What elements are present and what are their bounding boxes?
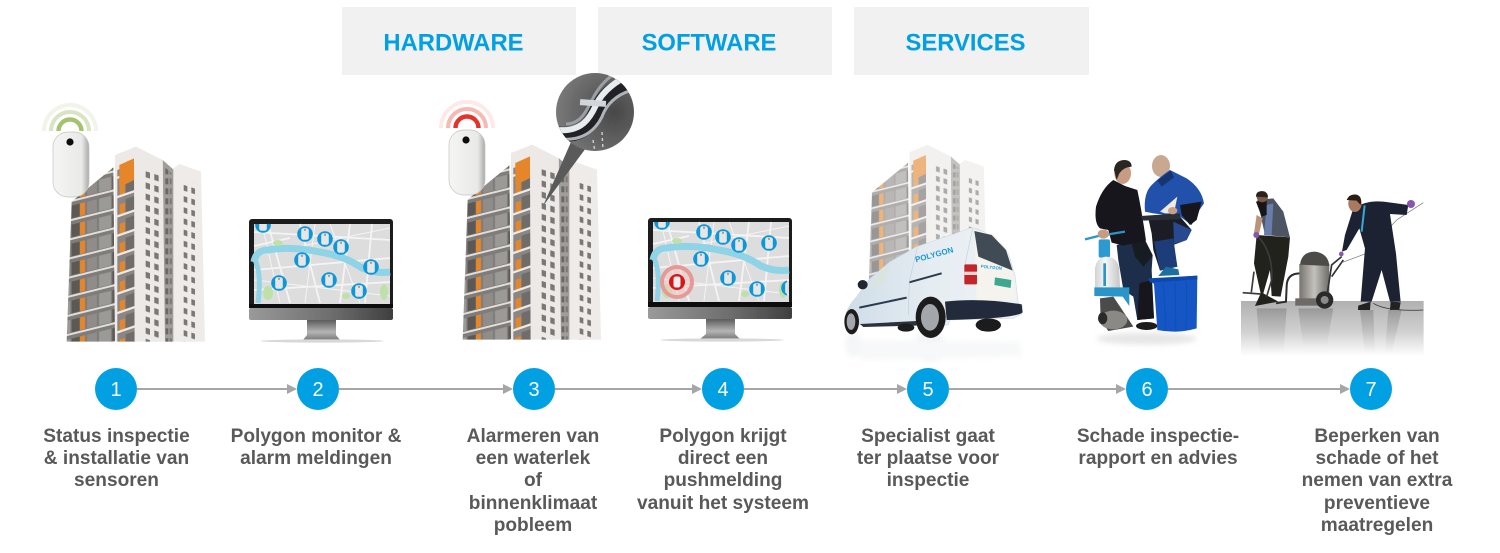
illustration: monitor with sensor map xyxy=(249,217,393,343)
step 2 badge xyxy=(297,368,339,410)
step 1 badge: 1 xyxy=(110,379,122,401)
step 3 text: binnenklimaat xyxy=(469,493,598,514)
step 3 text: pobleem xyxy=(494,515,572,536)
step 5 text: Specialist gaat xyxy=(861,426,995,447)
step 2 badge: 2 xyxy=(312,379,324,401)
step 7 badge: 7 xyxy=(1365,379,1377,401)
step 7 text: preventieve xyxy=(1324,493,1430,514)
step 6 text: rapport en advies xyxy=(1078,448,1238,469)
step 4 badge: 4 xyxy=(717,379,729,401)
step 1 text: & installatie van xyxy=(44,448,189,469)
step 6 badge: 6 xyxy=(1141,379,1153,401)
illustration: cleaning crew with vacuum on wet floor xyxy=(1241,191,1424,356)
step 7 badge xyxy=(1350,368,1392,410)
timeline arrow 6 to 7 xyxy=(1168,384,1350,394)
step 4 text: Polygon krijgt xyxy=(659,426,787,447)
illustration: building with red sensor and leak callout xyxy=(441,72,634,340)
timeline arrow 3 to 4 xyxy=(555,384,702,394)
step 3 text: Alarmeren van xyxy=(467,426,599,447)
step 5 text: inspectie xyxy=(887,470,969,491)
timeline arrow 5 to 6 xyxy=(949,384,1126,394)
timeline arrow 4 to 5 xyxy=(744,384,907,394)
illustration: building with green sensor xyxy=(44,105,205,342)
timeline arrow 1 to 2 xyxy=(137,384,297,394)
step 7 text: Beperken van xyxy=(1314,426,1440,447)
step 1 badge xyxy=(95,368,137,410)
illustration: service van and building: POLYGON xyxy=(914,245,955,264)
step 4 text: direct een xyxy=(678,448,768,469)
step 2 text: alarm meldingen xyxy=(240,448,392,469)
step 3 text: een waterlek xyxy=(476,448,591,469)
header: HARDWARE xyxy=(342,7,576,75)
step 4 badge xyxy=(702,368,744,410)
step 6 text: Schade inspectie- xyxy=(1077,426,1239,447)
illustration: two inspectors with sprayer and bucket xyxy=(1085,155,1204,345)
header: SOFTWARE xyxy=(598,7,832,75)
step 5 text: ter plaatse voor xyxy=(857,448,1000,469)
illustration: service van and building: POLYGON xyxy=(981,264,1002,271)
step 5 badge: 5 xyxy=(922,379,934,401)
illustration: service van and building xyxy=(844,145,1023,362)
timeline arrow 2 to 3 xyxy=(339,384,513,394)
step 3 badge: 3 xyxy=(528,379,540,401)
step 1 text: Status inspectie xyxy=(43,426,190,447)
header: SOFTWARE: SOFTWARE xyxy=(642,30,776,56)
step 2 text: Polygon monitor & xyxy=(231,426,402,447)
step 5 badge xyxy=(907,368,949,410)
step 7 text: maatregelen xyxy=(1321,515,1433,536)
step 7 text: schade of het xyxy=(1315,448,1439,469)
header: HARDWARE: HARDWARE xyxy=(383,30,524,56)
step 4 text: pushmelding xyxy=(664,470,782,491)
header: SERVICES: SERVICES xyxy=(906,30,1025,56)
step 4 text: vanuit het systeem xyxy=(637,493,809,514)
illustration: monitor with alarm map xyxy=(648,214,797,342)
step 7 text: nemen van extra xyxy=(1302,470,1453,491)
step 1 text: sensoren xyxy=(74,470,159,491)
step 3 badge xyxy=(513,368,555,410)
header: SERVICES xyxy=(854,7,1089,75)
step 3 text: of xyxy=(524,470,543,491)
step 6 badge xyxy=(1126,368,1168,410)
